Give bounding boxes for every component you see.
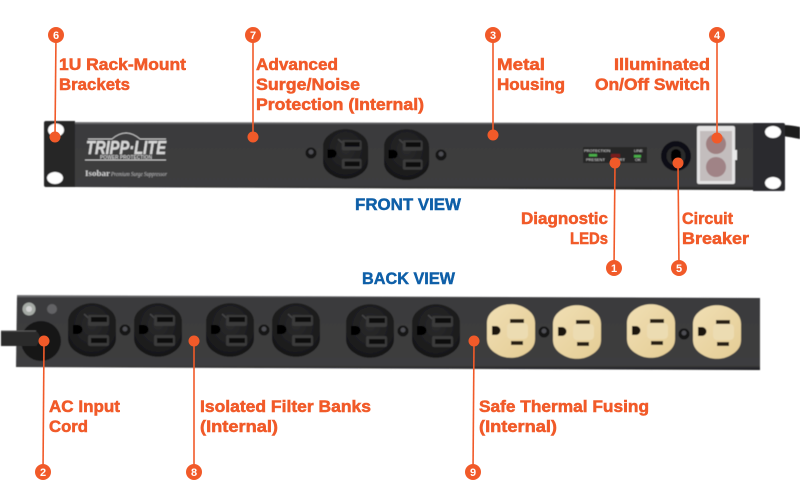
black outlets	[68, 303, 460, 358]
AC cord and grommet	[1, 321, 61, 361]
callout 4: illuminated switch: On/Off Switch	[595, 75, 710, 94]
ground bolt and indicator	[22, 302, 57, 316]
callout 9: safe thermal fusing	[465, 336, 649, 480]
callout 3: metal housing: Metal	[497, 55, 545, 74]
Tripp Lite logo: TRIPP·LITE	[86, 138, 167, 158]
callout 7: surge/noise protection: Surge/Noise	[256, 75, 360, 94]
callout 2: AC input cord	[35, 336, 120, 480]
bracket holes	[47, 124, 781, 189]
callout 3: metal housing: 3	[490, 30, 496, 42]
callout 7: surge/noise protection: 7	[250, 30, 256, 42]
callout 8: isolated filter banks: 8	[191, 467, 197, 479]
circuit breaker	[661, 141, 691, 171]
callout 8: isolated filter banks	[186, 336, 371, 480]
callout 9: safe thermal fusing: Safe Thermal Fusing	[479, 397, 649, 416]
callout 5: circuit breaker: 5	[676, 263, 682, 275]
callout 7: surge/noise protection: Protection (Internal)	[256, 95, 424, 114]
diagnostic LED panel: SHORT	[611, 157, 625, 162]
front outlets	[306, 129, 446, 180]
callout 3: metal housing: Housing	[497, 75, 565, 94]
front view heading: FRONT VIEW	[355, 196, 461, 214]
callout 7: surge/noise protection	[245, 27, 424, 142]
callout 7: surge/noise protection: Advanced	[256, 55, 338, 74]
callout 4: illuminated switch: 4	[714, 30, 721, 42]
back view heading: BACK VIEW	[362, 270, 455, 288]
callout 6: rack-mount brackets: 6	[53, 30, 59, 42]
callout 5: circuit breaker	[671, 158, 749, 276]
chassis, front	[75, 122, 753, 190]
callout 1: diagnostic LEDs: LEDs	[570, 229, 608, 248]
Tripp Lite logo: Isobar	[85, 169, 110, 178]
Tripp Lite logo: POWER PROTECTION	[100, 155, 152, 161]
illuminated switch cover	[697, 126, 737, 184]
callout 1: diagnostic LEDs	[521, 158, 622, 276]
callout 8: isolated filter banks: (Internal)	[200, 417, 278, 436]
callout 8: isolated filter banks: Isolated Filter Banks	[200, 397, 371, 416]
callout 2: AC input cord: AC Input	[49, 397, 120, 416]
left rack bracket	[44, 121, 75, 187]
diagnostic LED panel: PRESENT	[586, 157, 605, 162]
callout 4: illuminated switch: Illuminated	[614, 55, 710, 74]
callout 2: AC input cord: 2	[40, 467, 46, 479]
diagnostic LED panel: PROTECTION	[584, 148, 610, 153]
callout 6: rack-mount brackets	[48, 27, 186, 142]
callout 9: safe thermal fusing: 9	[470, 467, 476, 479]
Tripp Lite logo: Premium Surge Suppressor	[110, 172, 168, 178]
ivory outlets	[487, 304, 741, 359]
callout 1: diagnostic LEDs: Diagnostic	[521, 209, 608, 228]
power cord, front	[783, 125, 800, 139]
Tripp Lite logo	[85, 133, 168, 178]
front view power strip	[44, 121, 800, 191]
diagnostic LED panel: LINE	[634, 148, 643, 153]
back view power strip	[1, 295, 760, 370]
back screws	[120, 324, 690, 340]
diagnostic LED panel: OK	[635, 157, 641, 162]
callout 6: rack-mount brackets: Brackets	[59, 75, 130, 94]
callout 2: AC input cord: Cord	[49, 417, 88, 436]
right rack bracket	[753, 123, 785, 191]
callout 1: diagnostic LEDs: 1	[611, 263, 617, 275]
callout 4: illuminated switch	[595, 27, 725, 144]
callout 6: rack-mount brackets: 1U Rack-Mount	[59, 55, 186, 74]
callout 3: metal housing	[485, 27, 565, 140]
callout 9: safe thermal fusing: (Internal)	[479, 417, 557, 436]
chassis, back	[16, 295, 760, 370]
callout 5: circuit breaker: Breaker	[682, 229, 749, 248]
callout 5: circuit breaker: Circuit	[682, 209, 733, 228]
diagnostic LED panel	[583, 147, 647, 163]
